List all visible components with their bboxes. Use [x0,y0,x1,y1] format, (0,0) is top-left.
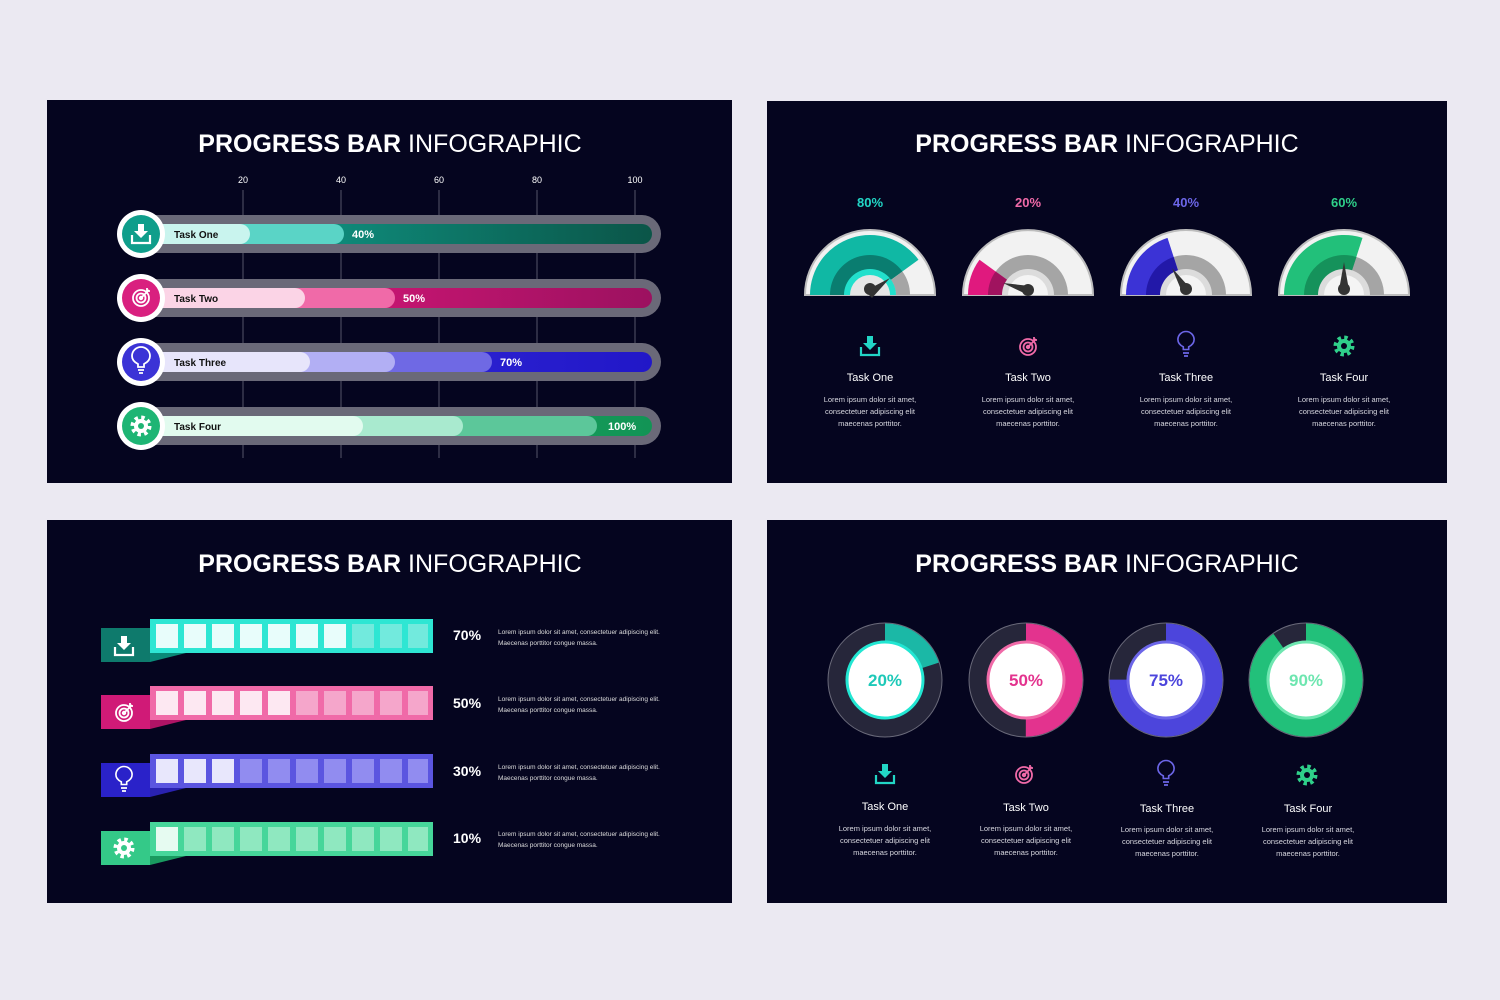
text: task descriptions: consectetuer adipiscing elit [981,836,1072,845]
text: task descriptions: Task Three [1159,372,1213,384]
row: 10%: Maecenas porttitor congue massa. [498,842,598,849]
panel: gauges [767,101,1447,483]
title: PROGRESS BAR INFOGRAPHIC [198,130,582,158]
axis labels: 60 [434,175,444,185]
text: task descriptions [824,372,1390,428]
text: task descriptions: maecenas porttitor. [994,848,1058,857]
text: task descriptions: consectetuer adipiscing elit [1122,837,1213,846]
row: 50%: Maecenas porttitor congue massa. [498,707,598,714]
icon: bulb purple [1178,332,1194,356]
text: task descriptions: consectetuer adipiscing elit [1299,407,1390,416]
gauge: task three 40% [1121,195,1251,295]
text: task descriptions: consectetuer adipiscing elit [825,407,916,416]
text: task descriptions: Task Three [1140,803,1194,815]
text: task descriptions [839,801,1354,858]
row: 30% [101,754,660,797]
gauge: task one 80%: 80% [857,195,883,210]
panel: donut charts [767,520,1447,903]
text: task descriptions: Task Four [1320,372,1368,384]
gauge: task four 60% [1279,195,1409,295]
title: PROGRESS BAR INFOGRAPHIC [915,130,1299,158]
text: task descriptions: Lorem ipsum dolor sit amet, [1262,825,1354,834]
row: 70% [101,619,660,662]
bar: task three [117,338,661,386]
icon: gear green [1336,338,1352,354]
text: task descriptions: consectetuer adipiscing elit [1141,407,1232,416]
text: task descriptions: consectetuer adipiscing elit [840,836,931,845]
bar: task one: Task One [174,230,219,241]
axis labels: 40 [336,175,346,185]
text: task descriptions: maecenas porttitor. [838,419,902,428]
text: task descriptions: Lorem ipsum dolor sit amet, [1140,395,1232,404]
text: task descriptions: Lorem ipsum dolor sit amet, [1121,825,1213,834]
donut: 20%: 20% [868,671,902,690]
donut: 90%: 90% [1289,671,1323,690]
icon: target pink [1020,337,1037,355]
bar: task three: Task Three [174,358,226,369]
donut: 75% [1109,623,1223,737]
icon: download teal [861,336,879,355]
text: task descriptions: Lorem ipsum dolor sit amet, [839,824,931,833]
axis labels: 20 [238,175,248,185]
icon: target pink [1016,765,1033,783]
panel: horizontal progress bars [47,100,732,483]
text: task descriptions: Task Two [1003,802,1049,814]
text: task descriptions: Task Four [1284,803,1332,815]
text: task descriptions: Task One [862,801,908,813]
gauge: task three 40%: 40% [1173,195,1199,210]
donut: 50%: 50% [1009,671,1043,690]
text: task descriptions: Lorem ipsum dolor sit amet, [1298,395,1390,404]
text: task descriptions: Task Two [1005,372,1051,384]
gauge: task one 80% [805,195,935,298]
row: 50%: 50% [453,695,482,711]
row: 30%: Lorem ipsum dolor sit amet, consectetuer adipiscing elit. [498,764,660,771]
donut: 75%: 75% [1149,671,1183,690]
bar: task one: 40% [352,229,374,241]
row: 30%: Maecenas porttitor congue massa. [498,775,598,782]
bar: task three: 70% [500,357,522,369]
text: task descriptions: Lorem ipsum dolor sit amet, [824,395,916,404]
text: task descriptions: Lorem ipsum dolor sit amet, [982,395,1074,404]
bar: task four [117,402,661,450]
text: task descriptions: consectetuer adipiscing elit [983,407,1074,416]
text: task descriptions: consectetuer adipiscing elit [1263,837,1354,846]
text: task descriptions: maecenas porttitor. [1135,849,1199,858]
text: task descriptions: maecenas porttitor. [1312,419,1376,428]
axis labels: 80 [532,175,542,185]
bar: task two: 50% [403,293,425,305]
bar: task four: Task Four [174,422,221,433]
row: 70%: Lorem ipsum dolor sit amet, consectetuer adipiscing elit. [498,629,660,636]
donut: 50% [969,623,1083,737]
bar: task two: Task Two [174,294,218,305]
icon: download teal [876,764,894,783]
gauge: task four 60%: 60% [1331,195,1357,210]
text: task descriptions: maecenas porttitor. [1154,419,1218,428]
bar: task two [117,274,661,322]
bar: task four: 100% [608,421,636,433]
icon: gear green [1298,766,1316,784]
title: PROGRESS BAR INFOGRAPHIC [198,550,582,578]
text: task descriptions: maecenas porttitor. [853,848,917,857]
donut: 20% [828,623,942,737]
title: PROGRESS BAR INFOGRAPHIC [915,550,1299,578]
icon: bulb purple [1158,760,1174,785]
text: task descriptions: Task One [847,372,893,384]
text: task descriptions: maecenas porttitor. [996,419,1060,428]
gauge: task two 20%: 20% [1015,195,1041,210]
row: 50% [101,686,660,729]
row: 10%: Lorem ipsum dolor sit amet, consectetuer adipiscing elit. [498,831,660,838]
row: 10%: 10% [453,830,482,846]
panel: block progress bars [47,520,732,903]
gauge: task two 20% [963,195,1093,296]
row: 30%: 30% [453,763,482,779]
text: task descriptions: Lorem ipsum dolor sit amet, [980,824,1072,833]
axis labels [238,175,643,185]
row: 70%: 70% [453,627,482,643]
row: 70%: Maecenas porttitor congue massa. [498,640,598,647]
row: 50%: Lorem ipsum dolor sit amet, consectetuer adipiscing elit. [498,696,660,703]
row: 10% [101,822,660,865]
bar: task one [117,210,661,258]
text: task descriptions: maecenas porttitor. [1276,849,1340,858]
axis labels: 100 [627,175,643,185]
donut: 90% [1249,623,1363,737]
